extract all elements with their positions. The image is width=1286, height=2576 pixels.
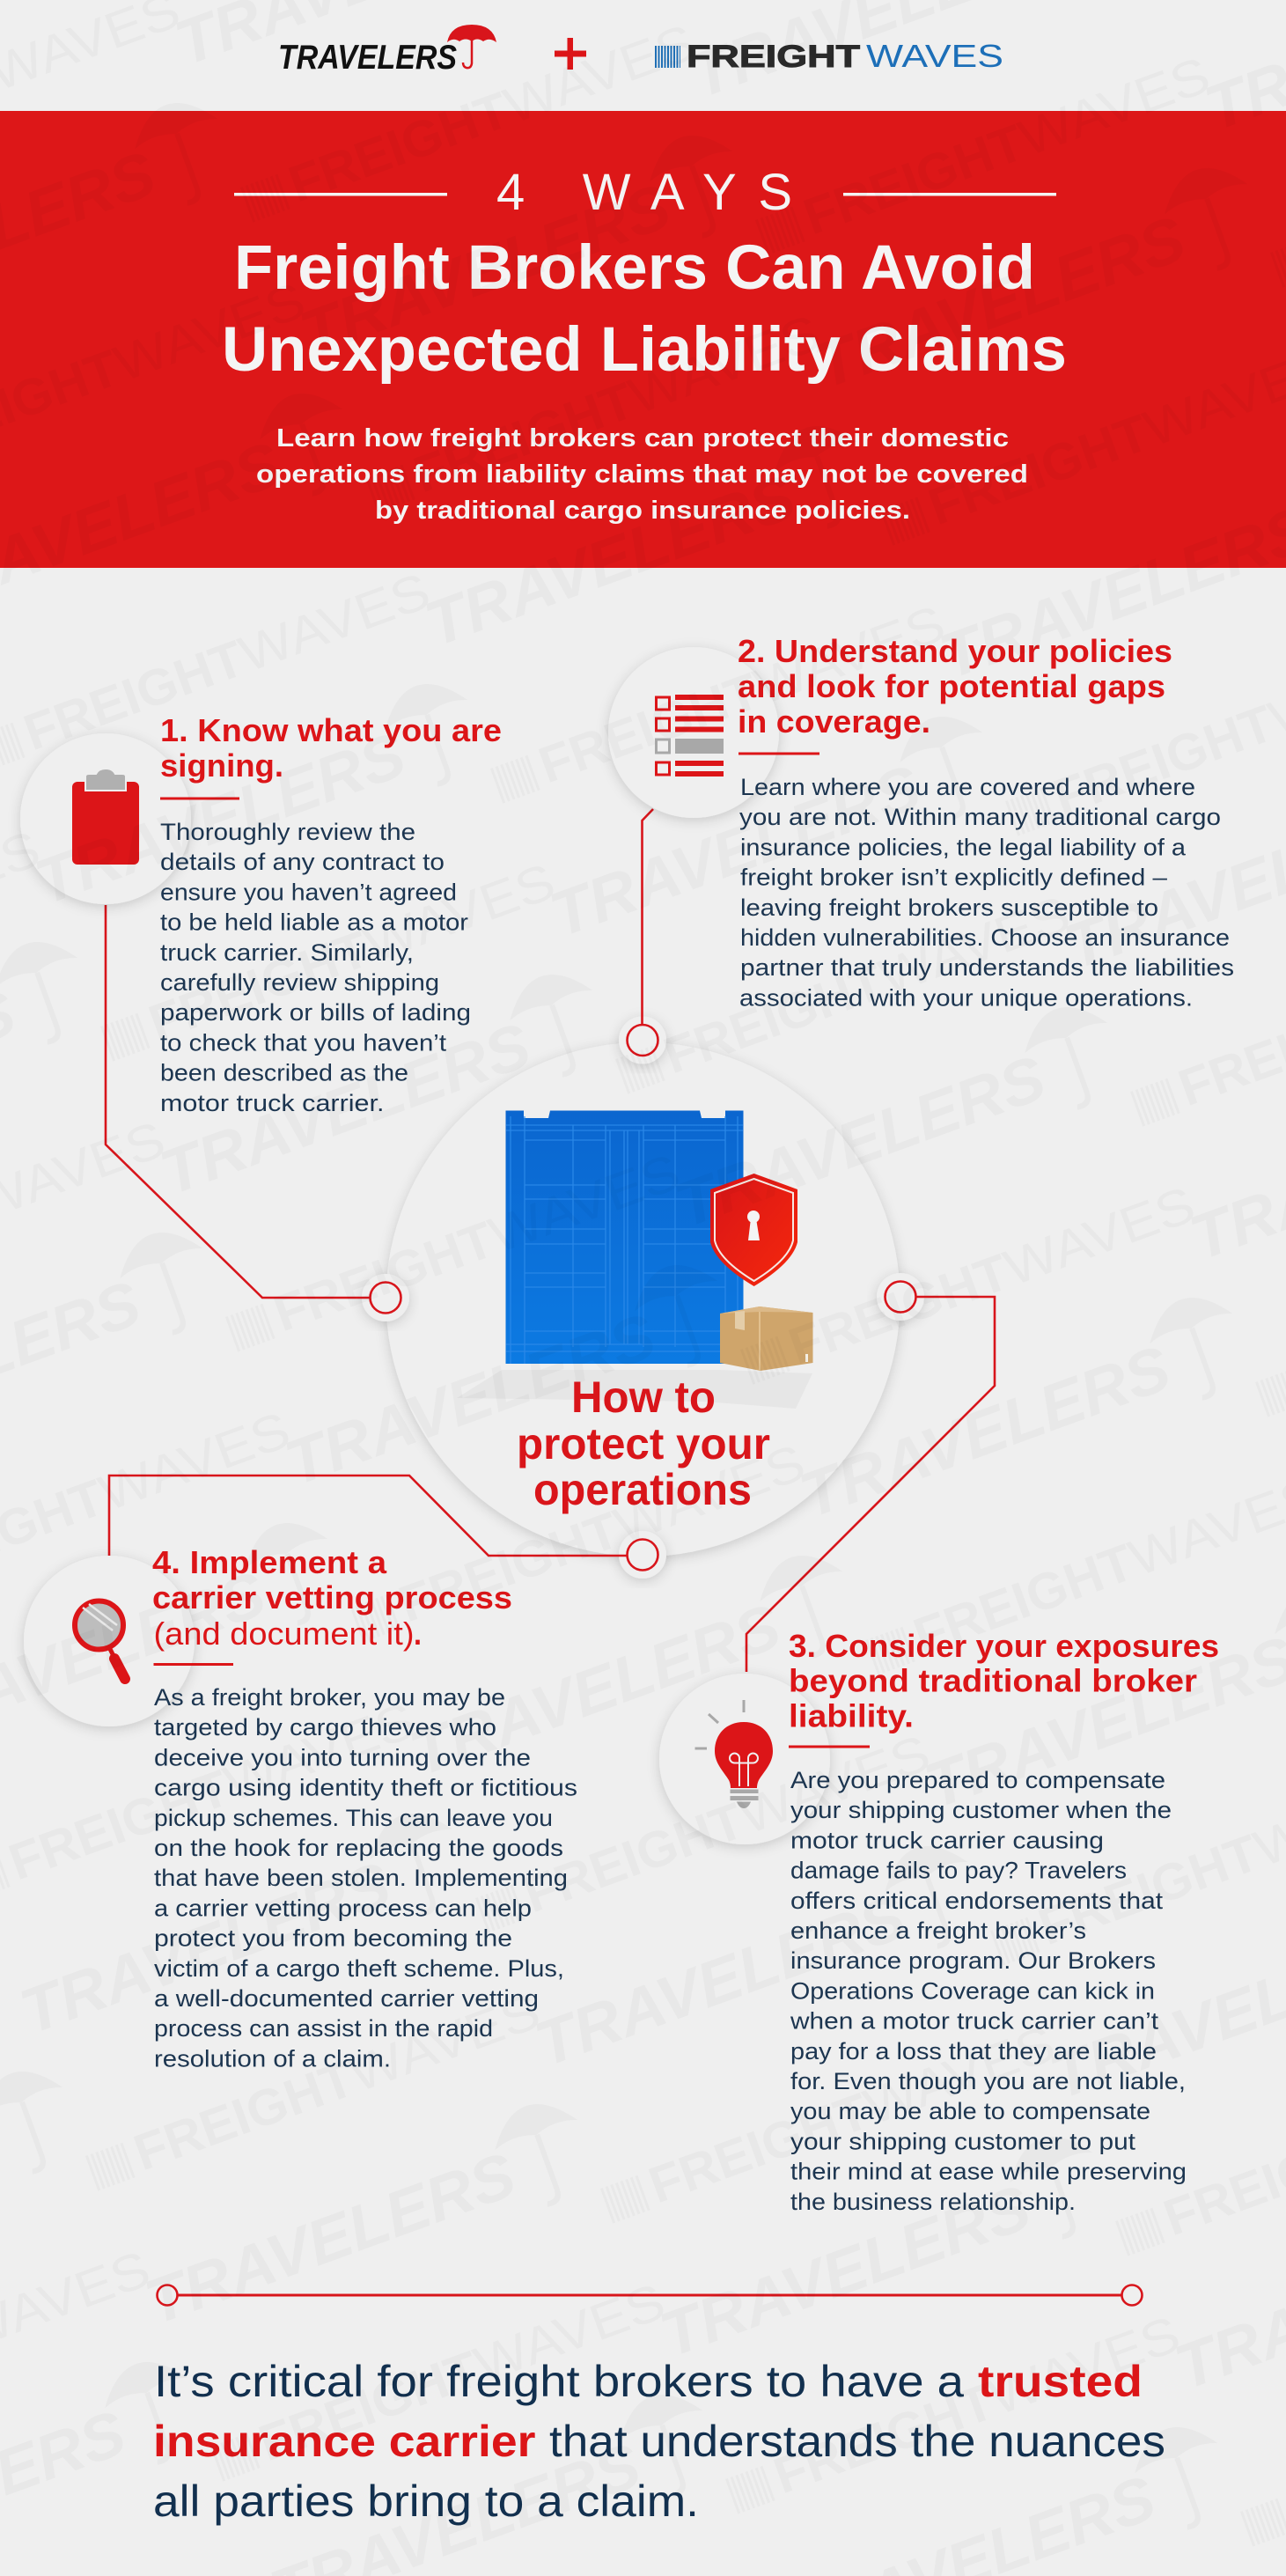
heading: liability. — [789, 1697, 914, 1734]
closing statement: It’s critical for freight brokers to have a — [154, 2357, 964, 2406]
background watermark pattern: FREIGHT — [767, 2373, 1001, 2505]
body text: for. Even though you are not liable, — [790, 2068, 1186, 2094]
logo: Travelers: TRAVELERS — [278, 39, 457, 77]
background watermark pattern: FREIGHT — [282, 81, 516, 213]
heading: carrier vetting process — [152, 1579, 512, 1616]
body text: resolution of a claim. — [154, 2045, 391, 2072]
body text: damage fails to pay? Travelers — [790, 1858, 1127, 1884]
body text: that have been stolen. Implementing — [154, 1865, 568, 1891]
background watermark pattern: WAVES — [746, 594, 952, 716]
background watermark pattern: TRAVELERS — [136, 2139, 525, 2338]
body text: ensure you haven’t agreed — [160, 879, 457, 905]
body text: Are you prepared to compensate — [790, 1767, 1165, 1793]
panel: red header banner — [0, 111, 1286, 568]
body text — [160, 819, 471, 1116]
panel: item 1 — [20, 712, 502, 1116]
background watermark pattern: FREIGHT — [392, 1501, 626, 1633]
subtitle: Learn how freight brokers can protect their domestic — [276, 424, 1009, 453]
body text: victim of a cargo theft scheme. Plus, — [154, 1955, 564, 1982]
heading — [152, 1544, 512, 1666]
background watermark pattern: FREIGHT — [532, 662, 766, 794]
panel: item 4 — [24, 1544, 577, 2072]
body text: hidden vulnerabilities. Choose an insurance — [740, 924, 1230, 951]
connector: hub to item 3 — [746, 1273, 995, 1672]
body text: details of any contract to — [160, 849, 445, 875]
body text: deceive you into turning over the — [154, 1744, 531, 1770]
closing statement — [153, 2357, 1165, 2526]
hub heading: How to — [571, 1373, 716, 1422]
background watermark pattern: FREIGHT — [1032, 1824, 1266, 1956]
hub heading: protect your — [517, 1419, 770, 1468]
background watermark pattern: FREIGHT — [127, 2050, 361, 2182]
body text: Thoroughly review the — [160, 819, 415, 845]
heading — [160, 712, 502, 799]
background watermark pattern: FREIGHT — [1047, 695, 1281, 827]
body text: As a freight broker, you may be — [154, 1684, 505, 1711]
background watermark pattern: FREIGHT — [657, 953, 891, 1085]
body text: pay for a loss that they are liable — [790, 2038, 1157, 2064]
body text: protect you from becoming the — [154, 1925, 512, 1952]
background watermark pattern: FREIGHT — [142, 920, 376, 1052]
heading — [789, 1628, 1219, 1748]
connector: item 2 to hub — [619, 809, 666, 1064]
background watermark pattern: WAVES — [856, 2014, 1062, 2136]
background watermark pattern: FREIGHT — [782, 1243, 1016, 1375]
body text: partner that truly understands the liabilities — [740, 954, 1234, 981]
body text: been described as the — [160, 1060, 408, 1086]
body text: your shipping customer to put — [790, 2128, 1136, 2154]
background watermark pattern: WAVES — [1011, 46, 1217, 167]
body text: Learn where you are covered and where — [740, 774, 1195, 800]
background watermark pattern: TRAVELERS — [416, 461, 805, 660]
body text: cargo using identity theft or fictitious — [154, 1775, 577, 1801]
background watermark pattern: FREIGHT — [907, 1534, 1141, 1666]
icon: light bulb — [695, 1700, 773, 1808]
body text: to be held liable as a motor — [160, 909, 468, 936]
body text: pickup schemes. This can leave you — [154, 1805, 553, 1831]
body text: a well-documented carrier vetting — [154, 1985, 539, 2012]
hub heading: operations — [533, 1465, 752, 1514]
background watermark pattern: TRAVELERS — [291, 171, 680, 370]
background watermark pattern: WAVES — [981, 2305, 1187, 2426]
background watermark pattern: WAVES — [496, 13, 702, 135]
subtitle — [256, 424, 1028, 525]
body text: you may be able to compensate — [790, 2098, 1150, 2124]
body text: your shipping customer when the — [790, 1797, 1172, 1823]
heading: 4 ways — [234, 164, 1056, 221]
background watermark pattern: TRAVELERS — [26, 719, 415, 918]
background watermark pattern: WAVES — [231, 562, 437, 683]
body text: truck carrier. Similarly, — [160, 939, 414, 966]
background watermark pattern: TRAVELERS — [806, 203, 1194, 402]
subtitle: operations from liability claims that may not be covered — [256, 460, 1028, 489]
background watermark pattern: TRAVELERS — [651, 2172, 1040, 2371]
background watermark pattern: FREIGHT — [2, 1759, 236, 1891]
body text: a carrier vetting process can help — [154, 1895, 532, 1921]
body text: process can assist in the rapid — [154, 2015, 493, 2042]
closing statement: insurance carrier — [153, 2417, 535, 2466]
background watermark pattern: WAVES — [92, 1401, 298, 1522]
body text: insurance program. Our Brokers — [790, 1947, 1156, 1974]
logo: FreightWaves — [655, 38, 1003, 74]
background watermark pattern: WAVES — [107, 271, 312, 393]
background watermark pattern: TRAVELERS — [276, 1300, 665, 1499]
icon: magnifying glass — [75, 1601, 125, 1679]
background watermark pattern: WAVES — [871, 885, 1077, 1006]
body text: insurance policies, the legal liability of a — [740, 834, 1187, 860]
background watermark pattern: WAVES — [996, 1175, 1202, 1297]
body text: enhance a freight broker’s — [790, 1917, 1086, 1944]
heading: 4. Implement a — [152, 1544, 387, 1580]
background watermark pattern: WAVES — [481, 1143, 687, 1264]
body text: associated with your unique operations. — [739, 984, 1193, 1011]
background watermark pattern: TRAVELERS — [11, 1849, 400, 2048]
background watermark pattern: FREIGHT — [922, 404, 1156, 536]
background watermark pattern: TRAVELERS — [791, 1333, 1179, 1532]
background watermark pattern: TRAVELERS — [541, 752, 930, 951]
background watermark pattern: WAVES — [217, 1691, 423, 1813]
background watermark pattern: TRAVELERS — [401, 1591, 790, 1790]
title — [222, 233, 1067, 385]
background watermark pattern: FREIGHT — [407, 372, 641, 504]
background watermark pattern: FREIGHT — [17, 629, 251, 762]
closing statement: trusted — [978, 2357, 1143, 2406]
heading: 4 ways: 4 WAYS — [496, 164, 792, 221]
heading: . — [414, 1616, 422, 1652]
background watermark pattern: FREIGHT — [252, 2340, 486, 2472]
background watermark pattern: FREIGHT — [517, 1792, 751, 1924]
logo: FreightWaves: FREIGHT — [687, 40, 860, 74]
body text — [154, 1684, 577, 2072]
body text: carefully review shipping — [160, 969, 439, 996]
heading: 1. Know what you are — [160, 712, 502, 748]
background watermark pattern: TRAVELERS — [151, 1010, 540, 1209]
body text: targeted by cargo thieves who — [154, 1714, 496, 1741]
heading: 2. Understand your policies — [738, 633, 1172, 669]
icon: checklist — [657, 695, 724, 776]
background watermark pattern: WAVES — [342, 1982, 547, 2103]
body text: on the hook for replacing the goods — [154, 1835, 563, 1861]
illustration: cardboard box — [720, 1306, 813, 1371]
closing statement: all parties bring to a claim. — [153, 2477, 699, 2526]
body text: their mind at ease while preserving — [790, 2159, 1187, 2185]
body text: paperwork or bills of lading — [160, 999, 471, 1026]
background watermark pattern: FREIGHT — [267, 1211, 501, 1343]
illustration: red shield with keyhole — [710, 1174, 797, 1286]
subtitle: by traditional cargo insurance policies. — [375, 497, 910, 525]
icon: clipboard — [72, 769, 139, 865]
heading: 3. Consider your exposures — [789, 1628, 1219, 1664]
body text: to check that you haven’t — [160, 1029, 447, 1056]
hub heading — [517, 1373, 770, 1514]
body text: motor truck carrier. — [160, 1090, 384, 1116]
logo: FreightWaves: WAVES — [866, 38, 1003, 74]
divider with end nodes — [157, 2285, 1143, 2305]
title: Freight Brokers Can Avoid — [234, 233, 1035, 303]
connector: item 1 to hub — [106, 905, 409, 1321]
heading: in coverage. — [738, 703, 930, 740]
background watermark pattern: TRAVELERS — [666, 1042, 1055, 1241]
heading: signing. — [160, 747, 283, 784]
body text: motor truck carrier causing — [790, 1827, 1104, 1853]
background watermark pattern: WAVES — [356, 852, 562, 974]
body text — [739, 774, 1234, 1011]
body text: the business relationship. — [790, 2189, 1076, 2215]
icon: plus sign — [555, 38, 586, 70]
body text — [790, 1767, 1187, 2215]
closing statement: that understands the nuances — [549, 2417, 1165, 2466]
body text: Operations Coverage can kick in — [790, 1977, 1155, 2004]
illustration: blue shipping container — [505, 1111, 743, 1364]
background watermark pattern: WAVES — [606, 1433, 812, 1555]
background watermark pattern: WAVES — [731, 1724, 937, 1845]
background watermark pattern: WAVES — [467, 2272, 672, 2394]
body text: offers critical endorsements that — [790, 1888, 1164, 1914]
container shadow — [457, 1370, 812, 1409]
heading — [738, 633, 1172, 755]
body text: when a motor truck carrier can’t — [790, 2008, 1159, 2035]
body text: you are not. Within many traditional cargo — [739, 804, 1221, 830]
connector: hub to item 4 — [109, 1476, 666, 1579]
background watermark pattern: WAVES — [621, 304, 827, 425]
panel: item 2 — [608, 633, 1234, 1011]
title: Unexpected Liability Claims — [222, 315, 1067, 385]
background watermark pattern: TRAVELERS — [526, 1881, 915, 2080]
body text: leaving freight brokers susceptible to — [740, 894, 1158, 921]
panel: item 3 — [659, 1628, 1219, 2215]
heading: (and document it) — [153, 1616, 414, 1652]
background watermark pattern: TRAVELERS — [916, 1623, 1286, 1822]
heading: beyond traditional broker — [789, 1662, 1197, 1699]
logo: Travelers — [278, 25, 496, 77]
background watermark pattern: FREIGHT — [642, 2082, 876, 2214]
body text: freight broker isn’t explicitly defined – — [740, 865, 1167, 891]
background watermark pattern: FREIGHT — [797, 114, 1031, 246]
heading: and look for potential gaps — [738, 668, 1165, 704]
panel: central hub circle — [386, 1042, 900, 1557]
